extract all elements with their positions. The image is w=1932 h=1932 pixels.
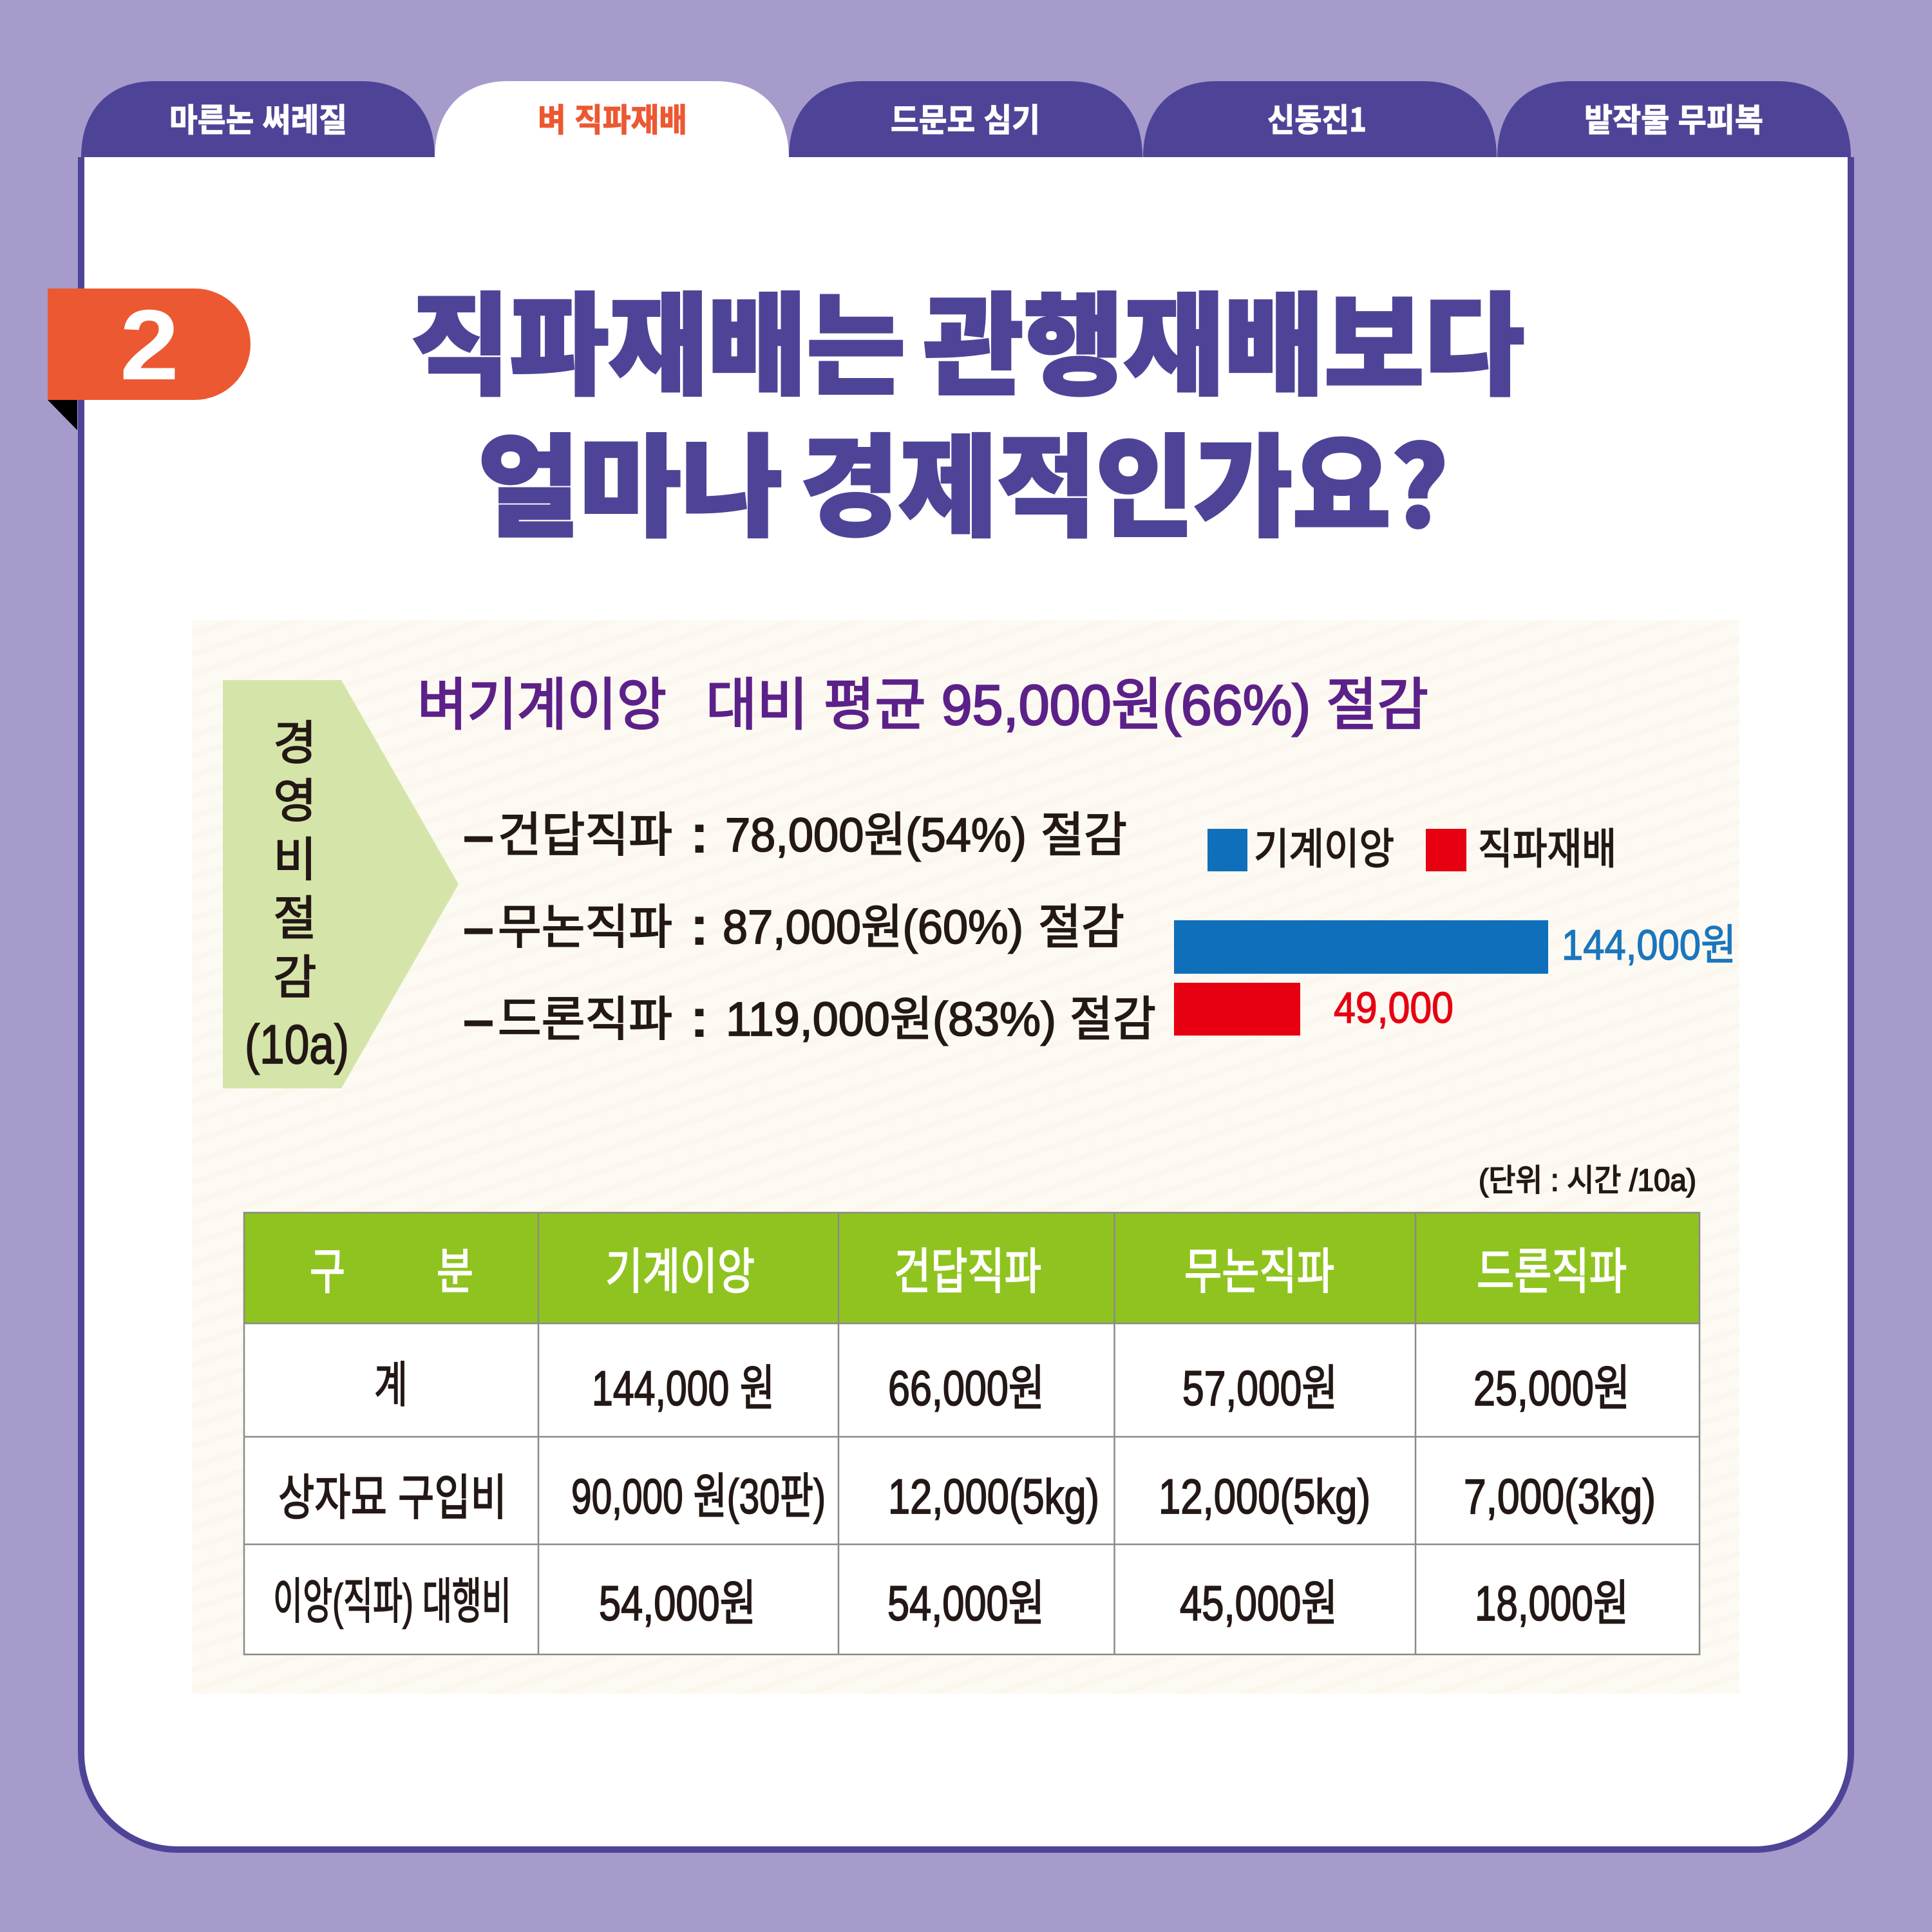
table row: 이앙(직파) 대행비: 이앙(직파) 대행비 xyxy=(273,1575,511,1629)
saving: 건답직파: 건답직파 xyxy=(498,808,672,862)
saving: 무논직파 xyxy=(466,900,1124,954)
title: 경제적인가요? xyxy=(800,398,1448,559)
saving: 건답직파 xyxy=(466,808,1127,862)
tab: 밭작물 무피복: 밭작물 무피복 xyxy=(1584,95,1763,141)
legend xyxy=(1208,825,1616,873)
table row: 이앙(직파) 대행비: 45,000원 xyxy=(1180,1577,1338,1631)
table row: 계: 25,000원 xyxy=(1473,1361,1630,1416)
table row: 상자묘 구입비: 상자묘 구입비 xyxy=(278,1471,507,1526)
saving: 건답직파: 절감 xyxy=(1041,808,1127,862)
table header: 무논직파 xyxy=(1184,1245,1334,1300)
table header: 기계이앙 xyxy=(605,1245,755,1300)
tab: 신동진1: 신동진1 xyxy=(1267,95,1367,141)
saving: 드론직파: 드론직파 xyxy=(498,992,672,1046)
table header: 분 xyxy=(437,1245,473,1300)
table row: 계 xyxy=(374,1358,1630,1416)
table row: 계: 66,000원 xyxy=(888,1361,1045,1416)
number ribbon: 2 xyxy=(120,289,179,401)
tab: 벼 직파재배 (active) xyxy=(435,81,789,158)
saving: 드론직파: 절감 xyxy=(1070,992,1156,1046)
saving: 무논직파: – xyxy=(466,900,492,954)
arrow: 경영비 절감: 감 xyxy=(273,952,317,1004)
table row: 상자묘 구입비: 12,000(5kg) xyxy=(888,1470,1099,1524)
arrow: 경영비 절감: 영 xyxy=(273,775,317,828)
headline: average saving: 벼기계이앙 xyxy=(417,673,667,737)
table row: 상자묘 구입비: 7,000(3kg) xyxy=(1464,1470,1656,1524)
table row: 이앙(직파) 대행비: 54,000원 xyxy=(887,1577,1045,1631)
table header: 건답직파 xyxy=(894,1245,1041,1300)
tab: 벼 직파재배 (active): 벼 직파재배 xyxy=(538,95,687,141)
table header xyxy=(310,1245,1627,1300)
saving: 무논직파: 무논직파 xyxy=(498,900,672,954)
arrow: 경영비 절감: (10a) xyxy=(245,1014,349,1075)
bar chart: 144,000원 xyxy=(1562,921,1736,969)
panel: cost comparison image xyxy=(192,620,1739,1694)
saving: 무논직파: 절감 xyxy=(1038,900,1124,954)
saving: 무논직파: : xyxy=(692,900,707,954)
table row: 상자묘 구입비 xyxy=(278,1470,1656,1526)
tab: 마른논 써레질 xyxy=(81,81,435,157)
legend: 기계이앙 xyxy=(1254,825,1394,873)
table row: 계: 144,000 원 xyxy=(592,1361,775,1416)
bar chart xyxy=(1174,920,1736,1036)
tab: 마른논 써레질: 마른논 써레질 xyxy=(169,95,347,141)
title: 얼마나 xyxy=(478,398,782,559)
saving: 드론직파: : xyxy=(692,992,707,1046)
saving: 드론직파 xyxy=(466,992,1156,1046)
arrow: 경영비 절감: 경 xyxy=(273,717,317,770)
title: 관행재배보다 xyxy=(923,256,1524,417)
saving: 건답직파: 78,000원(54%) xyxy=(725,808,1027,862)
table row: 상자묘 구입비: 12,000(5kg) xyxy=(1159,1470,1370,1524)
number ribbon xyxy=(48,289,251,430)
saving: 건답직파: : xyxy=(692,808,707,862)
saving: 드론직파: – xyxy=(466,992,492,1046)
tab: 밭작물 무피복 xyxy=(1497,81,1851,157)
table xyxy=(244,1213,1700,1654)
table row: 이앙(직파) 대행비: 54,000원 xyxy=(599,1577,756,1631)
bar chart: 49,000 xyxy=(1334,983,1454,1032)
saving list xyxy=(466,808,1156,1046)
table row: 계: 계 xyxy=(374,1358,408,1413)
table row: 상자묘 구입비: 90,000 원(30판) xyxy=(571,1470,826,1524)
arrow: 경영비 절감: 비 xyxy=(273,834,317,886)
tab: 드문모 심기: 드문모 심기 xyxy=(891,95,1040,141)
table row: 계: 57,000원 xyxy=(1182,1361,1338,1416)
table header: 구 xyxy=(310,1245,345,1300)
title xyxy=(411,256,1524,559)
saving: 드론직파: 119,000원(83%) xyxy=(726,992,1056,1046)
table header: 드론직파 xyxy=(1477,1245,1627,1300)
tab: 드문모 심기 xyxy=(789,81,1142,157)
tab: 신동진1 xyxy=(1143,81,1497,157)
title: 직파재배는 xyxy=(411,256,905,417)
arrow: 경영비 절감: 절 xyxy=(273,893,317,945)
unit note: (단위 : 시간 /10a) xyxy=(1479,1164,1696,1198)
table row: 이앙(직파) 대행비: 18,000원 xyxy=(1475,1577,1629,1631)
table row: 이앙(직파) 대행비 xyxy=(273,1575,1629,1631)
arrow: 경영비 절감 xyxy=(223,680,459,1088)
legend: 직파재배 xyxy=(1478,825,1616,873)
tab bar xyxy=(81,81,1851,158)
saving: 건답직파: – xyxy=(466,808,492,862)
headline: average saving: 대비 평균 95,000원(66%) 절감 xyxy=(706,673,1428,737)
saving: 무논직파: 87,000원(60%) xyxy=(723,900,1023,954)
